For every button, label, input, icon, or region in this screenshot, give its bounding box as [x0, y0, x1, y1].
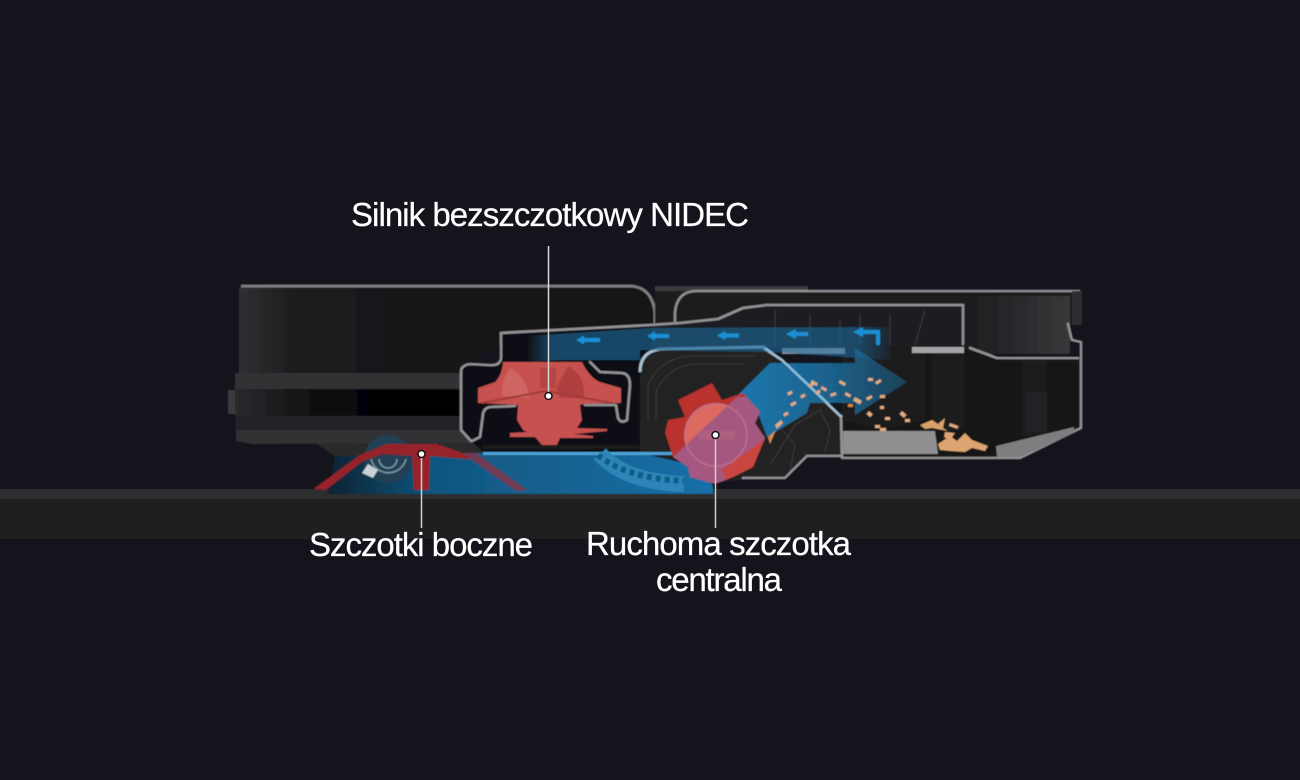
rear ramp: [996, 427, 1074, 457]
dust bin chamber: [842, 349, 1080, 458]
airflow band upper: [527, 327, 890, 362]
main fan motor: [478, 362, 621, 445]
chamber detail lines: [648, 310, 925, 470]
airflow band floor: [328, 453, 713, 494]
housing outlines: [461, 305, 1081, 478]
central brush: [664, 382, 766, 485]
brush chamber: [640, 348, 842, 485]
robot front shell: [228, 286, 655, 465]
side brushes: [313, 444, 527, 491]
label: central brush: [586, 525, 852, 598]
robot vacuum cross-section: [228, 286, 1082, 494]
motor chamber base: [483, 445, 640, 449]
duct upper chamber: [652, 305, 963, 347]
dust particles: [768, 378, 988, 452]
label: motor: Silnik bezszczotkowy NIDEC: [351, 196, 749, 233]
callout line: central brush: [712, 432, 719, 528]
label: central brush: centralna: [656, 561, 783, 598]
dust bin box: [843, 431, 938, 454]
flow arrows: [576, 327, 880, 345]
callout line: side brushes: [418, 450, 425, 528]
motor chamber: [461, 325, 660, 452]
air duct outline: [640, 347, 765, 372]
debris stream arrow: [738, 348, 907, 437]
toothed wheel: [598, 454, 684, 484]
wheel: [362, 435, 412, 483]
duct plate: [782, 347, 964, 354]
label: side brushes: Szczotki boczne: [309, 526, 533, 563]
floor band: [0, 489, 1300, 539]
callout line: motor: [545, 246, 552, 400]
robot rear shell: [655, 286, 1082, 354]
label: central brush: Ruchoma szczotka: [586, 525, 852, 562]
inner chambers: [461, 305, 1080, 485]
